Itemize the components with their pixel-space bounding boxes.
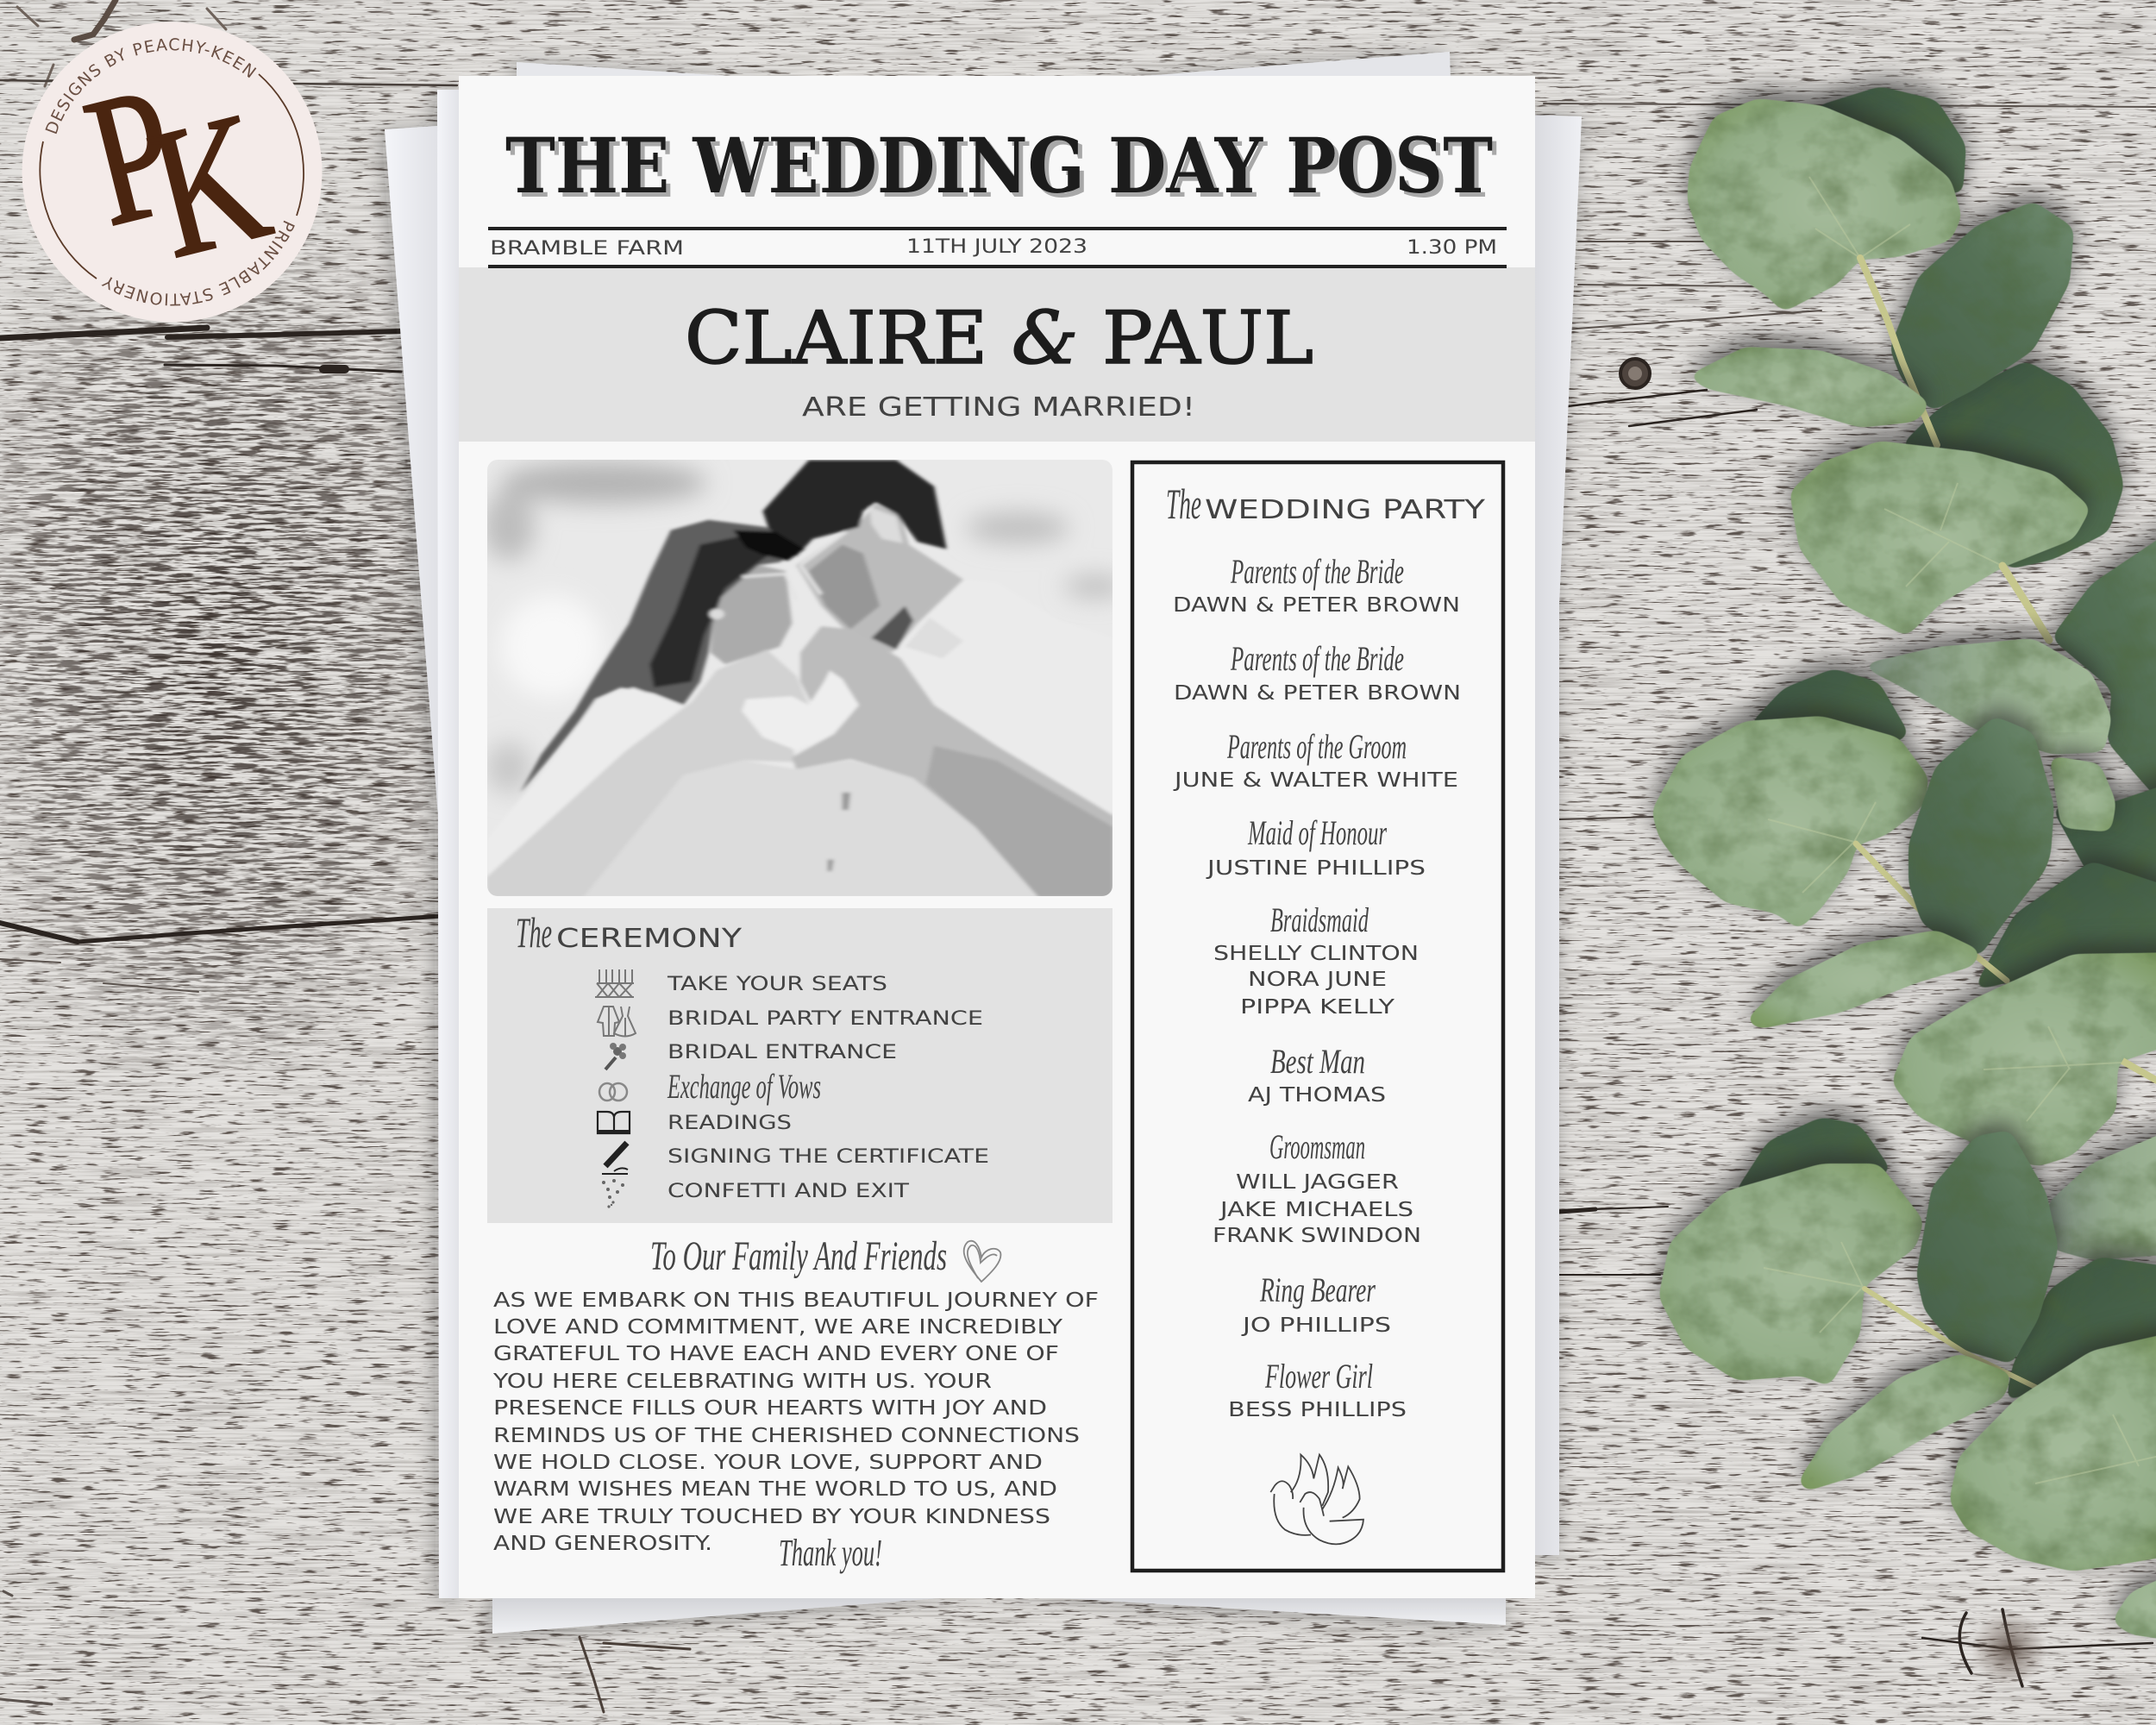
party: parents of the bride: DAWN & PETER BROWN bbox=[1173, 594, 1460, 617]
icon: bouquet bbox=[605, 1043, 626, 1070]
party: groomsmen: WILL JAGGER bbox=[1236, 1171, 1399, 1194]
icon: sketched heart bbox=[964, 1241, 1000, 1282]
party: ring bearer: JO PHILLIPS bbox=[1240, 1314, 1391, 1337]
PK monogram: K bbox=[133, 72, 286, 298]
ceremony order of events: Exchange of Vows bbox=[667, 1067, 821, 1106]
icon: confetti bbox=[602, 1179, 624, 1208]
message body text: PRESENCE FILLS OUR HEARTS WITH JOY AND bbox=[493, 1397, 1047, 1420]
party: flower girl: BESS PHILLIPS bbox=[1228, 1399, 1407, 1421]
icon: suit and dress bbox=[598, 1007, 636, 1037]
icon: chairs bbox=[595, 969, 634, 997]
location, date and time bar bbox=[490, 236, 1497, 260]
location, date and time bar: BRAMBLE FARM bbox=[490, 238, 684, 260]
party: parents of the bride repeated bbox=[1174, 639, 1461, 705]
badge ring bbox=[40, 74, 304, 279]
message body text bbox=[492, 1289, 1099, 1555]
panel: the wedding party bbox=[1132, 462, 1503, 1571]
party: bridesmaids bbox=[1213, 900, 1419, 1019]
front shirt bbox=[583, 761, 1038, 898]
party: best man bbox=[1248, 1042, 1386, 1107]
party: groomsmen bbox=[1213, 1127, 1421, 1247]
party: ring bearer: Ring Bearer bbox=[1259, 1270, 1376, 1309]
icon: open book bbox=[598, 1112, 630, 1133]
icon: pen signing bbox=[602, 1143, 628, 1174]
PK monogram bbox=[69, 46, 286, 298]
ceremony order of events: BRIDAL PARTY ENTRANCE bbox=[667, 1008, 983, 1030]
party: parents of the groom: Parents of the Groom bbox=[1226, 727, 1407, 766]
icon: two doves bbox=[1270, 1455, 1363, 1544]
stem bbox=[1865, 1289, 2037, 1388]
PK monogram: P bbox=[69, 46, 196, 266]
party: groomsmen: Groomsman bbox=[1269, 1127, 1365, 1166]
party: best man: AJ THOMAS bbox=[1248, 1084, 1386, 1107]
party: bridesmaids: Braidsmaid bbox=[1270, 900, 1369, 939]
party: parents of the groom: JUNE & WALTER WHITE bbox=[1172, 769, 1458, 792]
photo: couple making a heart with their hands bbox=[483, 460, 1126, 898]
message body text: AS WE EMBARK ON THIS BEAUTIFUL JOURNEY OF bbox=[493, 1289, 1099, 1312]
party: parents of the bride: Parents of the Bride bbox=[1230, 552, 1404, 591]
ceremony order of events: TAKE YOUR SEATS bbox=[667, 974, 887, 995]
masthead rules bbox=[488, 227, 1507, 230]
couple names: CLAIRE & PAUL bbox=[685, 296, 1313, 380]
man's hair bbox=[762, 461, 947, 556]
party: parents of the bride repeated: Parents of the Bride bbox=[1230, 639, 1404, 678]
ceremony heading: CEREMONY bbox=[556, 924, 743, 954]
subtitle: ARE GETTING MARRIED! bbox=[802, 392, 1195, 423]
thank you signature: Thank you! bbox=[779, 1532, 882, 1574]
names band bbox=[459, 265, 1535, 442]
badge text bbox=[45, 38, 295, 305]
back paper sheets bbox=[385, 52, 1582, 1634]
wedding party heading bbox=[1166, 480, 1486, 528]
message body text: WE ARE TRULY TOUCHED BY YOUR KINDNESS bbox=[493, 1506, 1050, 1528]
stem bbox=[2002, 566, 2049, 640]
party: bridesmaids: SHELLY CLINTON bbox=[1213, 943, 1419, 965]
ceremony order of events bbox=[667, 974, 989, 1202]
panel: the ceremony bbox=[487, 908, 1112, 1223]
message body text: AND GENEROSITY. bbox=[493, 1533, 712, 1555]
party: best man: Best Man bbox=[1270, 1042, 1365, 1081]
message body text: LOVE AND COMMITMENT, WE ARE INCREDIBLY bbox=[493, 1316, 1063, 1339]
party: groomsmen: FRANK SWINDON bbox=[1213, 1225, 1421, 1247]
party: flower girl bbox=[1228, 1357, 1407, 1421]
ceremony order of events: BRIDAL ENTRANCE bbox=[667, 1042, 897, 1063]
leaf group: lower branch bbox=[1658, 1117, 2156, 1643]
party: maid of honour bbox=[1205, 813, 1426, 880]
party: ring bearer bbox=[1240, 1270, 1391, 1337]
man's shirt bbox=[895, 640, 903, 649]
greeting heading with heart: To Our Family And Friends bbox=[650, 1233, 947, 1279]
message body text: REMINDS US OF THE CHERISHED CONNECTIONS bbox=[493, 1425, 1080, 1447]
party: maid of honour: Maid of Honour bbox=[1247, 813, 1387, 852]
wedding party heading: The bbox=[1166, 480, 1201, 528]
party: maid of honour: JUSTINE PHILLIPS bbox=[1205, 857, 1426, 880]
wedding party heading: WEDDING PARTY bbox=[1205, 495, 1486, 525]
man's arm and hand bbox=[792, 626, 1114, 898]
ceremony order of events: CONFETTI AND EXIT bbox=[667, 1181, 910, 1202]
woman's hair bbox=[520, 520, 800, 793]
party: bridesmaids: PIPPA KELLY bbox=[1240, 996, 1395, 1019]
badge text: DESIGNS BY PEACHY-KEEN bbox=[45, 38, 257, 135]
location, date and time bar: 11TH JULY 2023 bbox=[906, 236, 1087, 258]
message body text: WARM WISHES MEAN THE WORLD TO US, AND bbox=[493, 1478, 1057, 1501]
title: THE WEDDING DAY POST bbox=[505, 121, 1493, 210]
ceremony order of events: READINGS bbox=[667, 1113, 792, 1134]
party: bridesmaids: NORA JUNE bbox=[1248, 969, 1387, 991]
party: groomsmen: JAKE MICHAELS bbox=[1218, 1199, 1413, 1221]
stem bbox=[1860, 258, 1937, 445]
leaf group: middle branch bbox=[1651, 518, 2156, 1167]
glasses bbox=[742, 531, 846, 600]
message body text: GRATEFUL TO HAVE EACH AND EVERY ONE OF bbox=[493, 1343, 1059, 1365]
woman's arm and hand bbox=[487, 649, 809, 898]
heart opening bbox=[742, 673, 859, 750]
party: parents of the bride bbox=[1173, 552, 1460, 617]
icon: rings bbox=[599, 1083, 627, 1101]
ceremony heading bbox=[516, 908, 743, 957]
woman's shirt sleeve bbox=[487, 687, 683, 877]
ceremony heading: The bbox=[516, 908, 552, 957]
location, date and time bar: 1.30 PM bbox=[1407, 237, 1497, 259]
message body text: YOU HERE CELEBRATING WITH US. YOUR bbox=[492, 1371, 992, 1393]
party: parents of the bride repeated: DAWN & PETER BROWN bbox=[1174, 682, 1461, 705]
party: parents of the groom bbox=[1172, 727, 1458, 792]
party: flower girl: Flower Girl bbox=[1264, 1357, 1373, 1396]
stem bbox=[2122, 1061, 2156, 1085]
message body text: WE HOLD CLOSE. YOUR LOVE, SUPPORT AND bbox=[493, 1452, 1043, 1474]
leaf group: upper branch bbox=[1687, 86, 2124, 640]
ceremony order of events: SIGNING THE CERTIFICATE bbox=[667, 1146, 989, 1168]
eucalyptus leaves bbox=[1651, 86, 2156, 1643]
main newspaper sheet bbox=[459, 76, 1535, 1598]
badge text: PRINTABLE STATIONERY bbox=[102, 221, 295, 305]
woman's face bbox=[711, 565, 792, 664]
logo badge bbox=[22, 22, 323, 323]
man's neck and face bbox=[796, 504, 963, 653]
stem bbox=[1856, 844, 2007, 981]
